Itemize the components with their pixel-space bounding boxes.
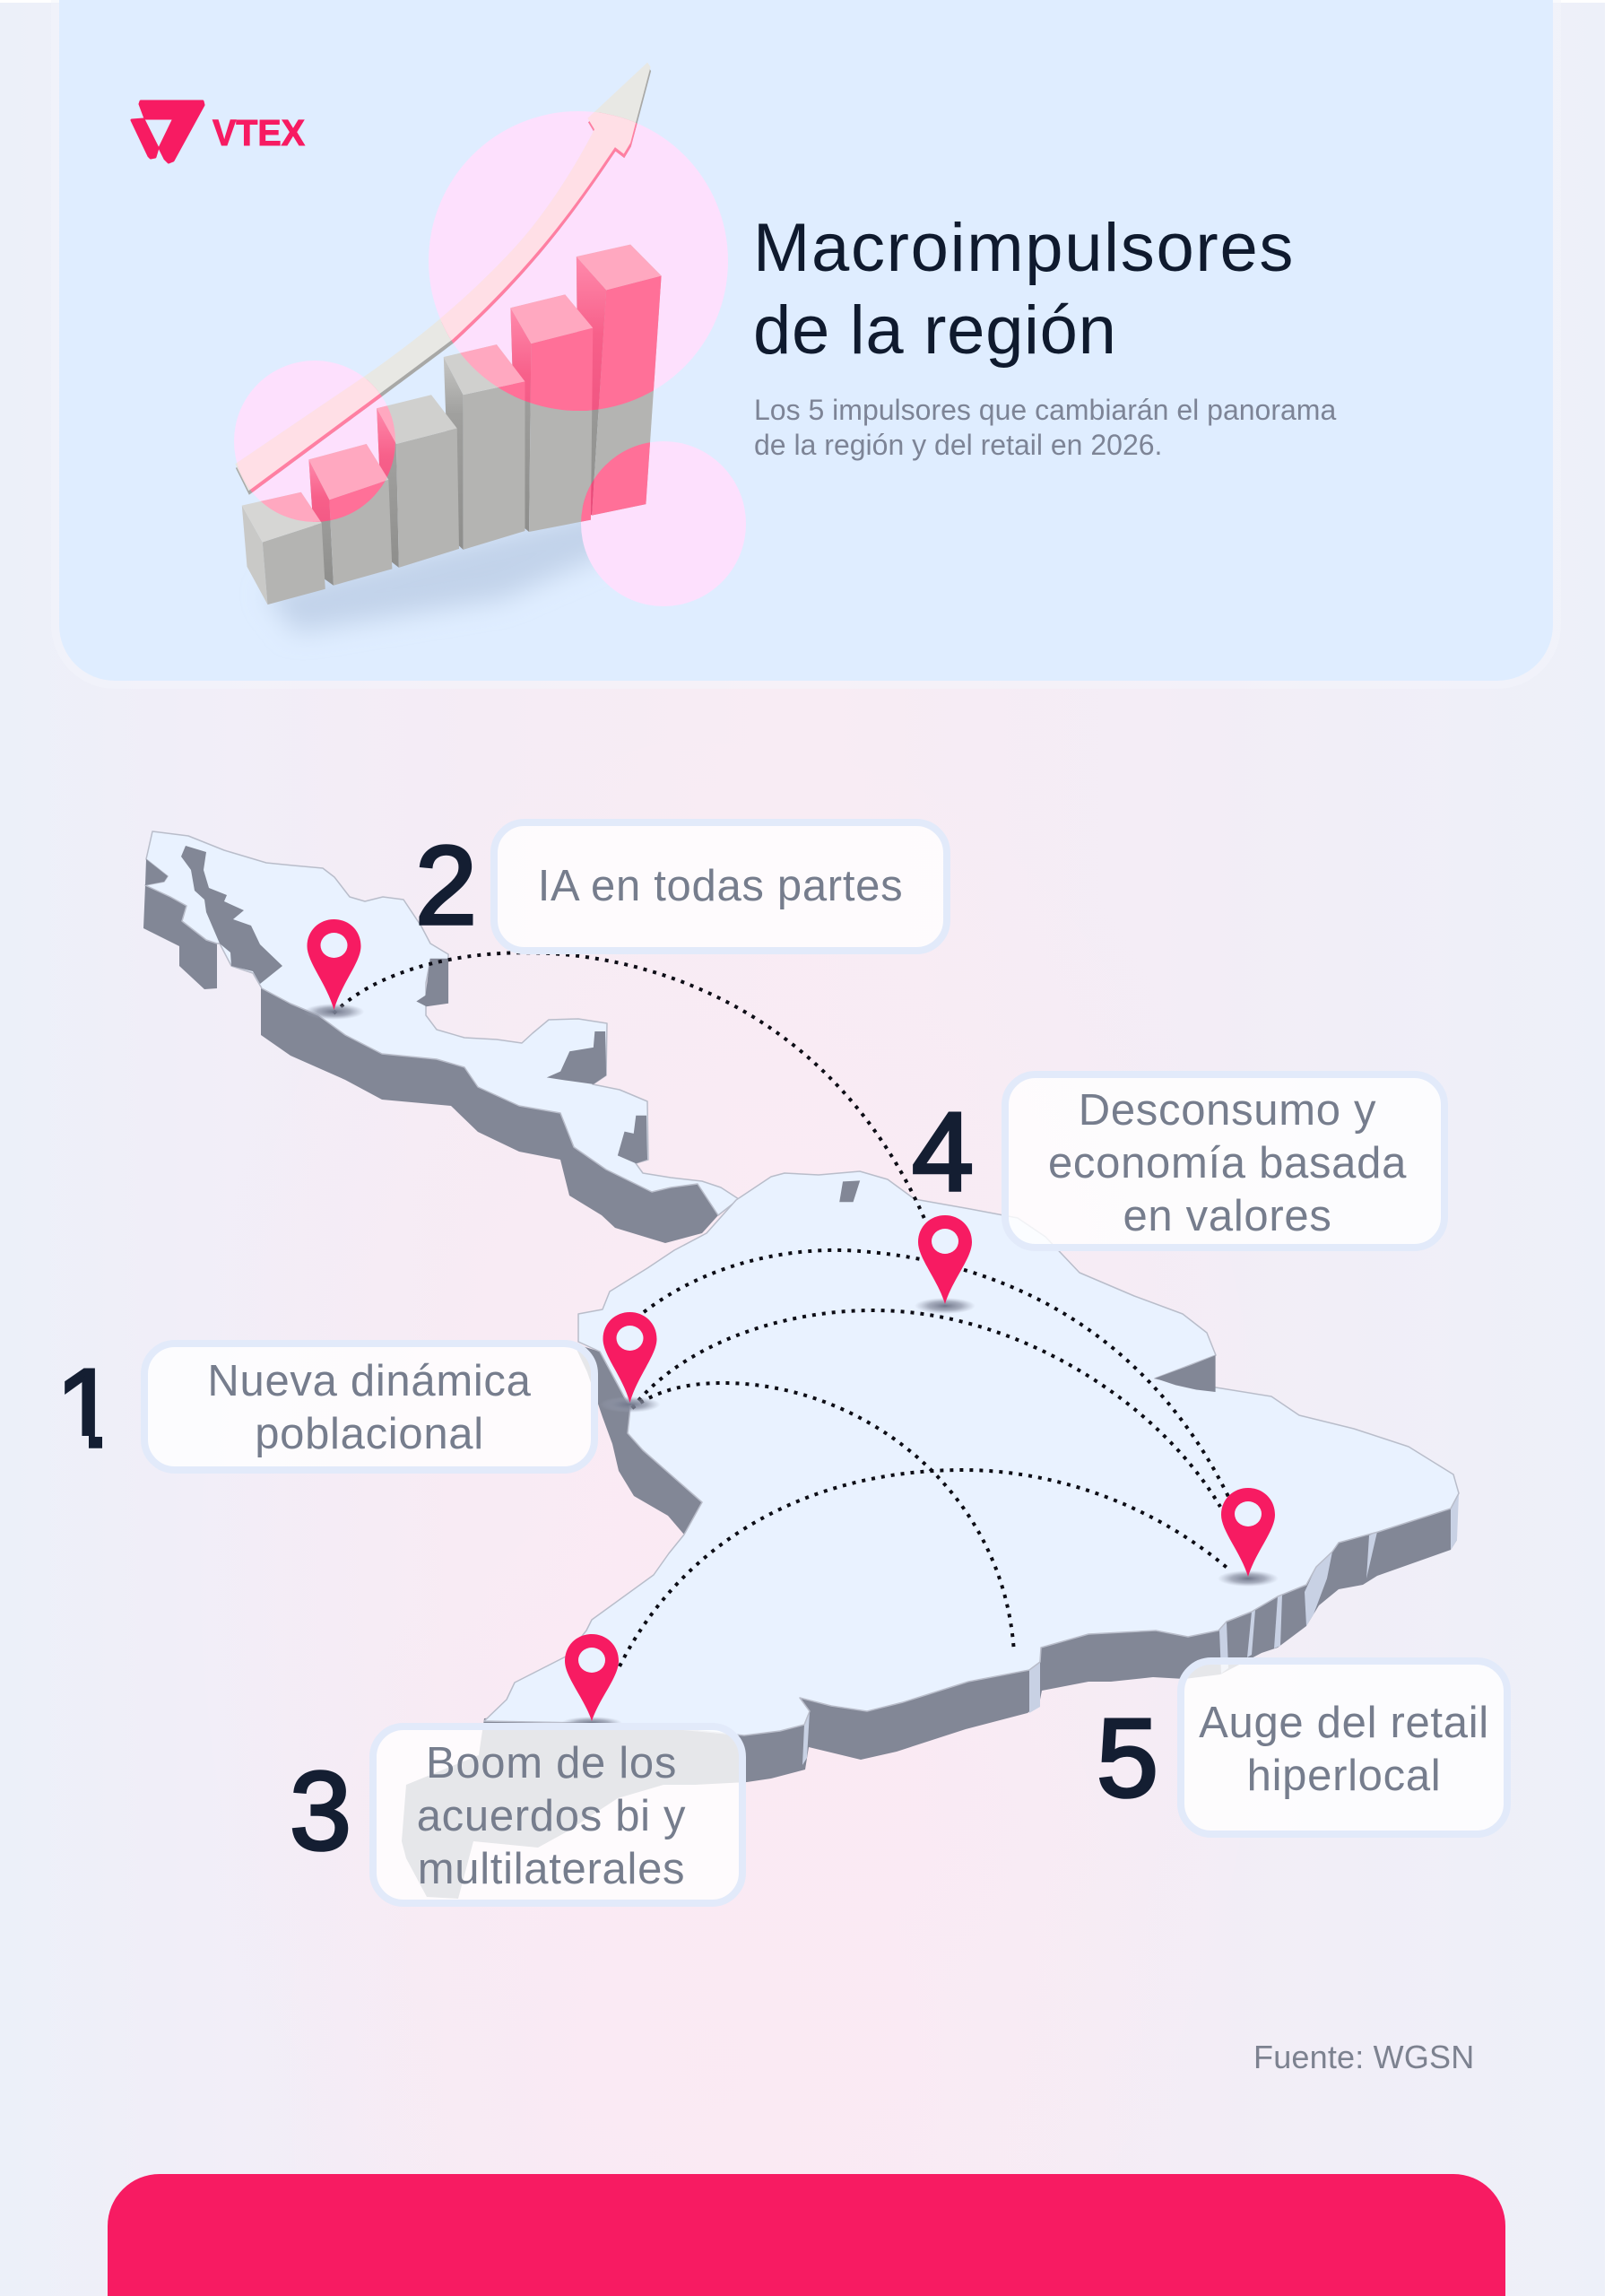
- source note: Fuente: WGSN: [1253, 2039, 1474, 2075]
- number 3: 3: [290, 1750, 351, 1874]
- pin: Chile: [561, 1634, 622, 1729]
- logo wordmark: VTEX: [212, 112, 305, 153]
- map inner walls: [145, 846, 1216, 1392]
- card 3: Boom de los acuerdos: multilaterales: [418, 1844, 685, 1892]
- card 5: Auge del retail hiperlocal: [1177, 1657, 1511, 1838]
- card 2: IA en todas partes: [490, 819, 950, 954]
- card 2: IA en todas partes: IA en todas partes: [538, 862, 903, 910]
- card 3: Boom de los acuerdos: acuerdos bi y: [417, 1792, 686, 1840]
- pin: Colombia: [599, 1312, 660, 1413]
- chart: rising bars and arrow: [234, 63, 746, 632]
- grey bars: [242, 245, 662, 604]
- card 3: Boom de los acuerdos: Boom de los: [426, 1738, 677, 1787]
- dotted route: Ecuador to Brazil: [632, 1310, 1220, 1507]
- card 4: Desconsumo: Desconsumo y: [1079, 1085, 1376, 1134]
- card 4: Desconsumo: en valores: [1123, 1191, 1332, 1239]
- subtitle: [754, 394, 1336, 461]
- map: Latin America: [143, 831, 1459, 1899]
- pin: Venezuela: [915, 1215, 976, 1314]
- card 1: Nueva dinámica poblacional: Nueva dinámica: [207, 1357, 532, 1405]
- map wall highlights: [802, 1493, 1459, 1765]
- pink portions of bars inside circles: [261, 244, 662, 522]
- pink circles: [234, 111, 746, 606]
- card 5: Auge del retail hiperlocal: hiperlocal: [1247, 1752, 1441, 1800]
- pin: Brazil: [1218, 1488, 1279, 1587]
- subtitle: de la región y del retail en 2026.: [754, 429, 1162, 461]
- subtitle: Los 5 impulsores que cambiarán el panorama: [754, 394, 1336, 426]
- arrow: growth: [235, 63, 651, 495]
- panel: header: [59, 0, 1553, 681]
- map top surface: South America: [484, 1171, 1459, 1735]
- number 1: 1: [56, 1347, 117, 1471]
- logo: VTEX: [132, 101, 305, 162]
- dotted route: Ecuador to Argentina coast: [632, 1383, 1014, 1653]
- graphics layer: logo, chart, map: [65, 63, 1460, 1899]
- card 4: Desconsumo: economía basada: [1048, 1139, 1407, 1187]
- title: de la región: [753, 292, 1117, 369]
- card 1: Nueva dinámica poblacional: [141, 1340, 598, 1474]
- title: [753, 210, 1295, 369]
- pin: Mexico: [303, 919, 364, 1020]
- dotted route: Chile to Brazil: [620, 1470, 1230, 1666]
- dotted route: Mexico to Venezuela: [334, 952, 925, 1221]
- map walls: [143, 885, 1457, 1899]
- number 4: 4: [912, 1091, 974, 1214]
- icon: VTEX mark: [132, 101, 204, 162]
- card 4: Desconsumo: [1002, 1071, 1448, 1251]
- arrow pink section: [237, 112, 637, 492]
- number 2: 2: [415, 824, 477, 948]
- title: Macroimpulsores: [753, 210, 1295, 286]
- card 5: Auge del retail hiperlocal: Auge del retail: [1199, 1699, 1489, 1747]
- footer band: [108, 2174, 1505, 2296]
- chart floor shadow: [264, 502, 681, 632]
- number 5: 5: [1097, 1697, 1158, 1821]
- card 1: Nueva dinámica poblacional: poblacional: [255, 1410, 484, 1458]
- card 3: Boom de los acuerdos: [369, 1723, 746, 1907]
- map top surface: Mexico and Central America: [145, 831, 739, 1215]
- dotted route: Colombia to Brazil north: [644, 1250, 1237, 1516]
